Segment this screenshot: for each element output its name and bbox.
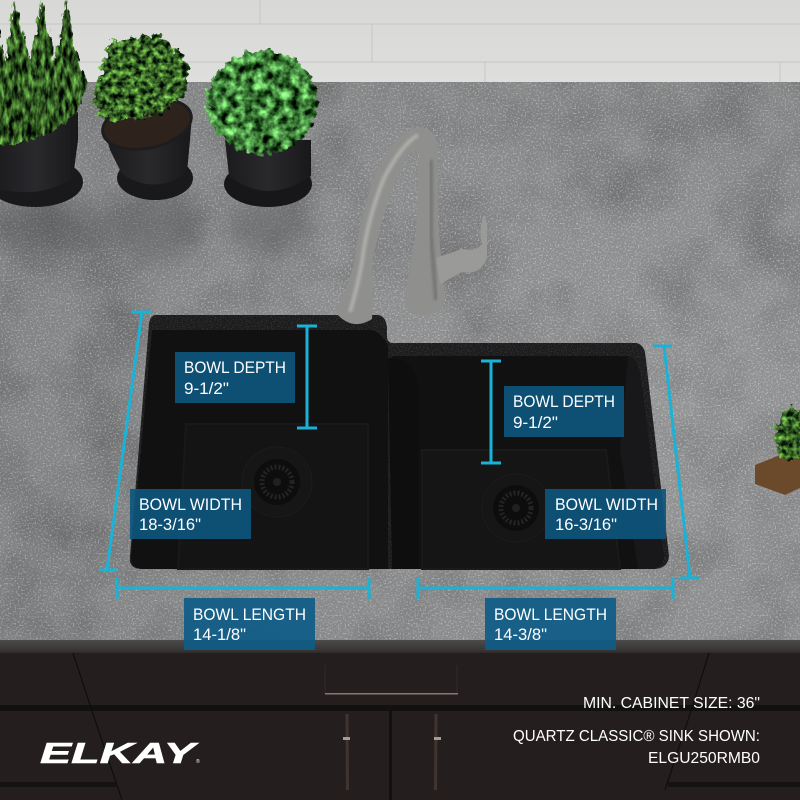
divider <box>388 358 418 569</box>
Elkay logo: ELKAY <box>40 738 199 770</box>
potted rosemary <box>0 0 88 207</box>
Elkay logo: ® <box>196 758 200 765</box>
potted herb <box>92 34 196 200</box>
label: left bowl length <box>184 598 315 650</box>
foliage <box>0 0 88 145</box>
left bowl <box>131 330 388 569</box>
label: left bowl depth <box>175 352 295 403</box>
pot <box>224 140 312 207</box>
door handles <box>343 714 441 790</box>
pot <box>98 91 196 200</box>
label: right bowl length <box>485 598 616 650</box>
label: right bowl depth: BOWL DEPTH <box>513 392 615 411</box>
label: left bowl width <box>130 489 251 539</box>
floor <box>0 0 800 84</box>
dimension: right bowl depth line <box>481 361 501 463</box>
label: left bowl length: BOWL LENGTH <box>193 605 306 624</box>
label: left bowl width: BOWL WIDTH <box>139 495 242 514</box>
label: left bowl depth: 9-1/2" <box>184 379 229 398</box>
drawer pull <box>325 665 458 694</box>
faucet <box>335 127 487 324</box>
Elkay logo <box>40 738 200 770</box>
label: right bowl width: 16-3/16" <box>555 515 617 534</box>
pot <box>0 112 83 207</box>
foliage <box>92 34 190 120</box>
sink rim <box>130 315 669 569</box>
label: left bowl length: 14-1/8" <box>193 625 246 644</box>
right bowl <box>392 356 664 569</box>
label: right bowl length: BOWL LENGTH <box>494 605 607 624</box>
pot shadows <box>0 187 314 263</box>
foliage <box>207 50 317 154</box>
dimension: left bowl depth line <box>297 326 317 428</box>
countertop front edge <box>0 640 800 654</box>
post highlight <box>431 160 436 300</box>
dimension: right bowl length line <box>418 578 673 599</box>
faucet post <box>405 150 445 316</box>
spout <box>335 127 438 324</box>
sink model note <box>513 728 760 767</box>
cutting board with herbs <box>755 407 800 495</box>
cabinet size note: MIN. CABINET SIZE: 36" <box>583 695 760 712</box>
label: right bowl depth <box>504 386 624 437</box>
dimension: left bowl length line <box>117 578 369 599</box>
label: right bowl width: BOWL WIDTH <box>555 495 658 514</box>
dimension: left bowl width line <box>99 312 152 570</box>
label: right bowl length: 14-3/8" <box>494 625 547 644</box>
label: right bowl depth: 9-1/2" <box>513 413 558 432</box>
spout highlight <box>350 135 418 312</box>
label: left bowl width: 18-3/16" <box>139 515 201 534</box>
sink <box>130 315 669 569</box>
label: left bowl depth: BOWL DEPTH <box>184 358 286 377</box>
sink model note: ELGU250RMB0 <box>648 750 760 767</box>
countertop <box>0 82 800 642</box>
dimension: right bowl width line <box>653 346 700 578</box>
potted ivy <box>207 50 317 207</box>
cabinets <box>0 653 800 800</box>
label: right bowl width <box>545 489 666 539</box>
right drain <box>482 474 550 542</box>
sink model note: QUARTZ CLASSIC® SINK SHOWN: <box>513 728 760 745</box>
left drain <box>242 447 312 517</box>
handle <box>436 214 487 284</box>
